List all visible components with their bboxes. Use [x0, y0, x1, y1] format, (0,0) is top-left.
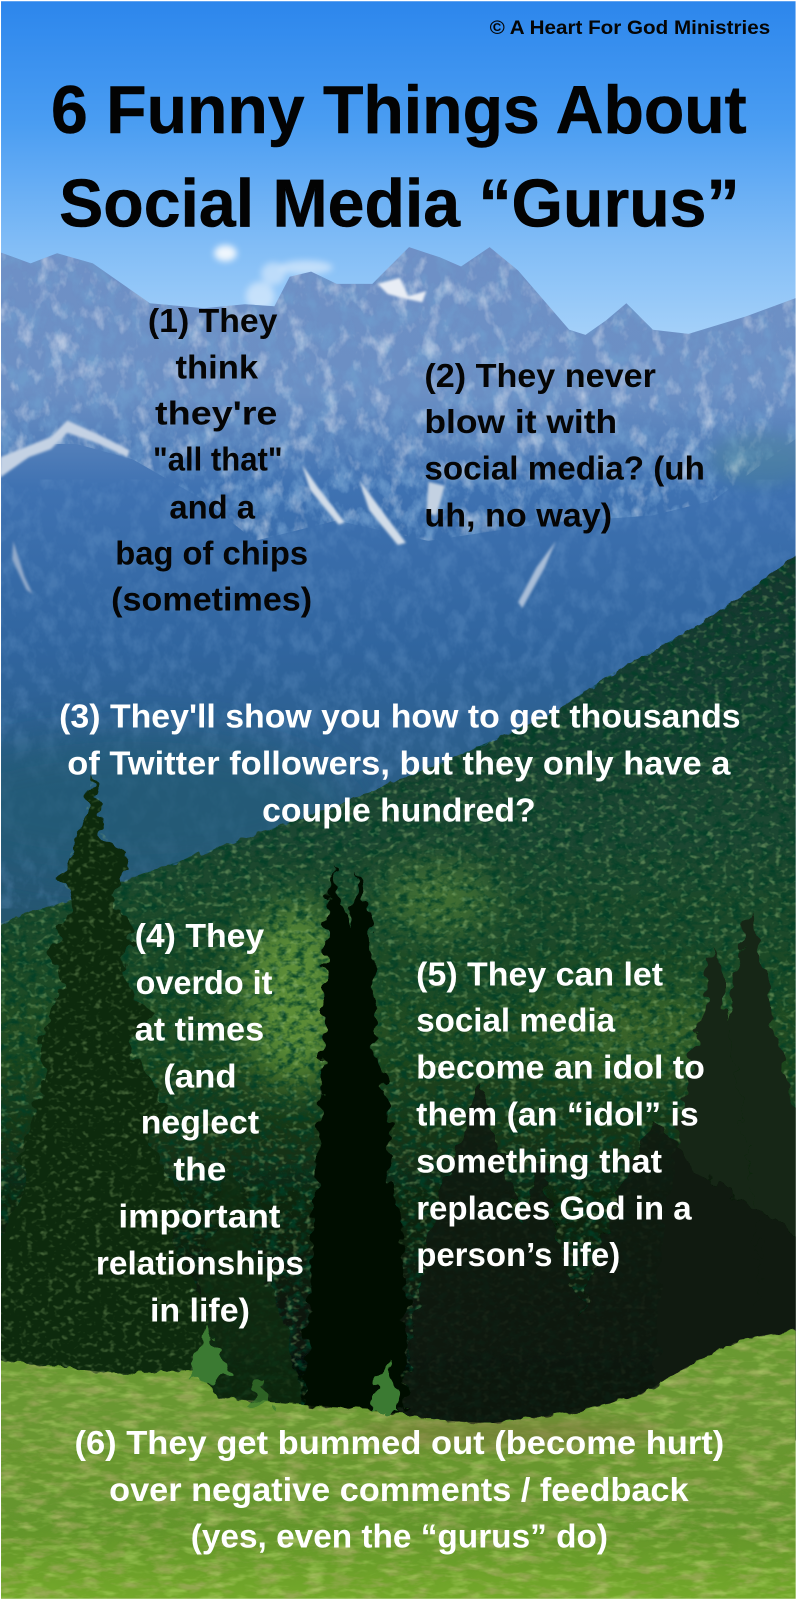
item 3: couple hundred?	[262, 792, 536, 829]
item 1: (sometimes)	[111, 581, 312, 618]
item 3: (3) They'll show you how to get thousands	[59, 699, 741, 736]
sunlit patches on hillside	[240, 862, 724, 1087]
far mountains	[0, 247, 796, 1020]
green right shoulder	[710, 430, 796, 486]
far right trees	[666, 912, 796, 1441]
item 5: something that	[416, 1143, 662, 1180]
item 5: person’s life)	[416, 1237, 620, 1274]
item 2: blow it with	[424, 404, 617, 441]
item 1: they're	[155, 396, 277, 433]
title: 6 Funny Things About	[51, 73, 747, 148]
item 6	[74, 1425, 724, 1556]
rock shading	[0, 245, 796, 551]
item 4: relationships	[96, 1245, 304, 1282]
valley haze	[0, 735, 347, 878]
snow and scree streaks	[0, 278, 556, 608]
item 4: (4) They	[135, 918, 264, 955]
item 1: and a	[169, 489, 255, 526]
item 4: (and	[163, 1059, 237, 1096]
item 4: neglect	[141, 1105, 259, 1142]
item 4: the	[173, 1151, 226, 1188]
item 3: of Twitter followers, but they only have a	[67, 745, 731, 782]
item 1: bag of chips	[115, 535, 308, 572]
copyright: © A Heart For God Ministries	[490, 17, 770, 39]
item 5: (5) They can let	[416, 957, 663, 994]
item 6: over negative comments / feedback	[109, 1472, 689, 1509]
item 2: (2) They never	[424, 358, 656, 395]
item 1: think	[175, 350, 258, 387]
item 4: important	[118, 1198, 281, 1235]
sky	[0, 0, 796, 352]
item 2	[424, 358, 705, 535]
forested hillside	[0, 536, 812, 1439]
item 4	[96, 918, 304, 1329]
centre twin conifers	[304, 867, 406, 1439]
shrubs	[190, 1322, 404, 1412]
item 6: (yes, even the “gurus” do)	[191, 1519, 608, 1556]
title	[51, 73, 747, 242]
item 5	[416, 957, 705, 1274]
clouds	[214, 245, 333, 310]
item 4: overdo it	[136, 965, 272, 1002]
item 2: social media? (uh	[424, 451, 705, 488]
left conifer foliage	[0, 776, 214, 1388]
lower slope shading	[0, 480, 796, 908]
item 4: in life)	[150, 1292, 250, 1329]
item 5: social media	[416, 1003, 615, 1040]
background dark tree mass	[184, 1082, 812, 1439]
item 5: replaces God in a	[416, 1190, 692, 1227]
left conifer	[0, 776, 209, 1388]
item 1: (1) They	[148, 303, 278, 340]
item 1: "all that"	[153, 442, 283, 479]
item 6: (6) They get bummed out (become hurt)	[74, 1425, 724, 1462]
item 5: them (an “idol” is	[416, 1096, 699, 1133]
grass meadow	[0, 1324, 812, 1600]
item 2: uh, no way)	[424, 498, 612, 535]
item 1	[111, 303, 312, 618]
grass texture	[0, 1321, 796, 1600]
title: Social Media “Gurus”	[59, 167, 740, 242]
item 5: become an idol to	[416, 1049, 705, 1086]
item 4: at times	[135, 1012, 264, 1049]
item 3	[59, 699, 741, 829]
hillside texture	[0, 551, 796, 1439]
